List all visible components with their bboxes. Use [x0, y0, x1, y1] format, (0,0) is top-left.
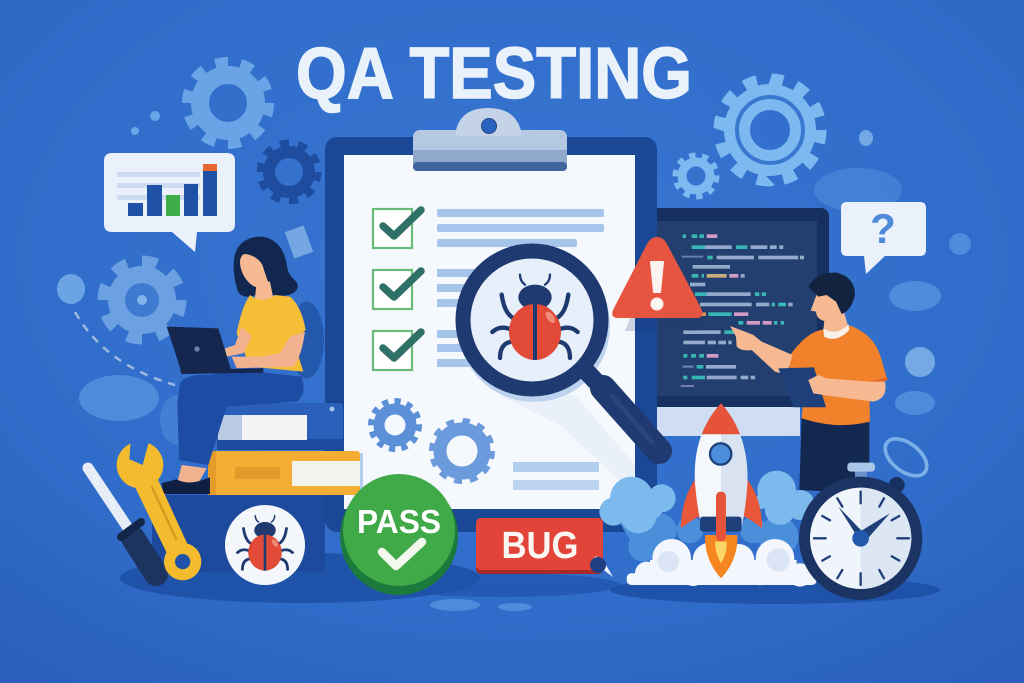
- shirt: [237, 295, 306, 372]
- magnified bug: [492, 275, 578, 360]
- body: [695, 434, 747, 527]
- screwdriver: [88, 468, 156, 574]
- flame: [705, 535, 737, 578]
- BUG tag: [476, 518, 613, 577]
- pants: [177, 370, 304, 465]
- leg foot: [177, 465, 207, 485]
- shirt: [787, 325, 887, 425]
- gear: top right: [720, 80, 820, 180]
- right arm: [232, 332, 305, 368]
- gear: dark: [261, 144, 317, 200]
- neck: [255, 282, 273, 303]
- fins: [681, 477, 702, 528]
- white clouds: [627, 539, 817, 587]
- gear: top left: [188, 63, 268, 143]
- blue clouds: [620, 513, 798, 562]
- paper gears: [372, 402, 491, 480]
- text lines: [437, 209, 604, 490]
- nozzle: [700, 517, 742, 532]
- wrench: [117, 440, 201, 580]
- laptop: [167, 327, 232, 373]
- decorative blobs: [57, 111, 971, 611]
- speech bubble: question: ?: [870, 205, 896, 252]
- hair: [808, 273, 855, 314]
- PASS badge: PASS: [357, 503, 441, 540]
- gear: mid left: [104, 262, 180, 338]
- neck: [823, 310, 848, 333]
- speech bubble: question: [841, 202, 926, 274]
- left arm: [225, 327, 252, 357]
- BUG tag: BUG: [502, 525, 578, 567]
- nose: [702, 403, 740, 434]
- paper: [344, 155, 635, 509]
- stopwatch: [799, 432, 933, 600]
- board: [325, 137, 657, 532]
- gear: small right: [676, 156, 716, 196]
- warning triangle: [612, 237, 702, 331]
- books: [208, 403, 363, 495]
- man pointing: [730, 273, 887, 492]
- clipboard: [325, 108, 657, 532]
- ticks: [814, 492, 909, 585]
- speech bubble: bar chart: [104, 153, 235, 252]
- woman with laptop: [162, 237, 324, 494]
- holding arm: [808, 375, 886, 402]
- title: QA TESTING: [296, 34, 692, 114]
- rocket: [681, 403, 762, 578]
- dashed path: [75, 312, 175, 385]
- pants: [799, 417, 869, 492]
- tablet: [778, 367, 826, 407]
- magnifier shadow: [500, 395, 635, 495]
- collar: [823, 324, 849, 339]
- ring: [878, 432, 933, 483]
- center fin: [716, 492, 726, 541]
- pen: [590, 556, 613, 577]
- checklist: [373, 209, 421, 370]
- pointing arm: [730, 326, 793, 375]
- chair: [289, 302, 324, 378]
- hands: [838, 507, 864, 537]
- clip: [413, 108, 567, 171]
- box with bug badge: [152, 495, 325, 585]
- clouds: [599, 471, 817, 587]
- ground shadow: [120, 553, 940, 604]
- window: [710, 443, 731, 465]
- face: [240, 254, 268, 287]
- face: [811, 290, 842, 322]
- PASS badge: [340, 474, 458, 595]
- handle: [585, 370, 659, 451]
- magnifying glass: [458, 250, 659, 451]
- hair: [234, 237, 298, 297]
- monitor: [640, 208, 829, 436]
- code lines: [681, 234, 804, 387]
